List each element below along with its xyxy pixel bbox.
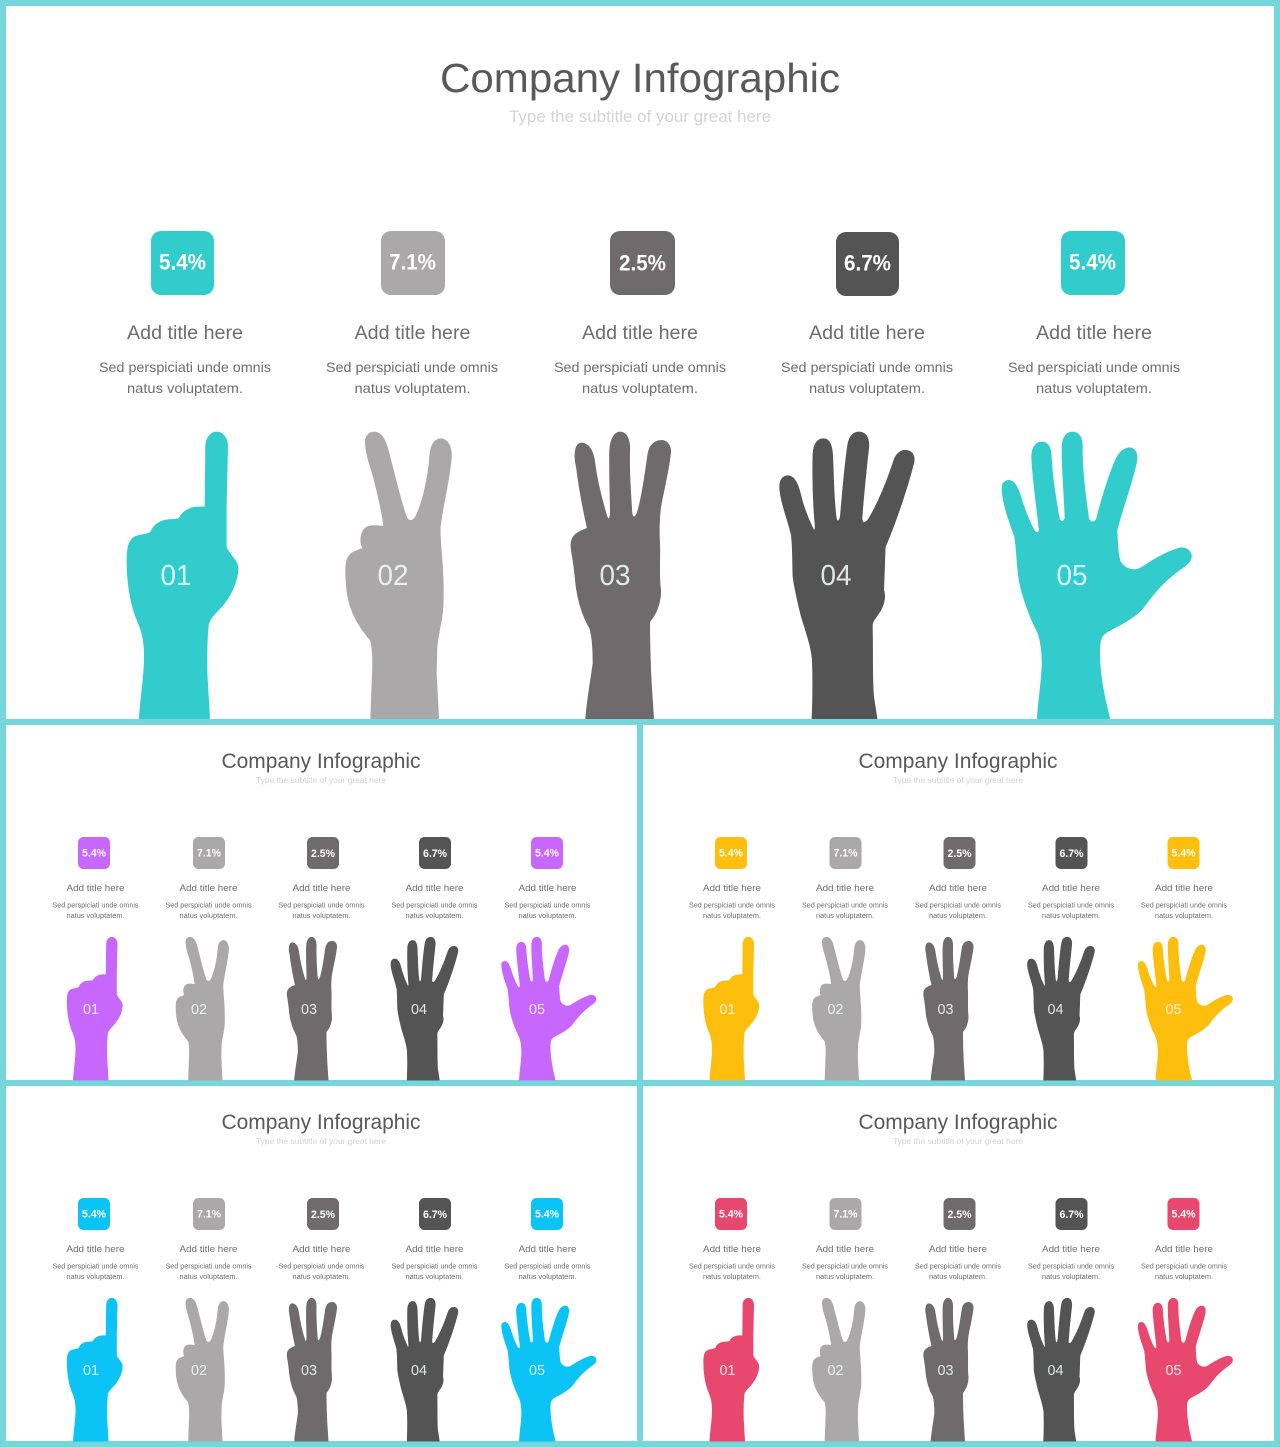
column 04: Add title here xyxy=(809,323,925,344)
small subtitle: Type the subtitle of your great here xyxy=(256,1136,386,1146)
column 03: 03 xyxy=(938,1002,954,1018)
column 01: natus voluptatem. xyxy=(703,1274,761,1281)
column 01: 01 xyxy=(720,1363,736,1379)
column 05: 05 xyxy=(529,1363,545,1379)
column 02: 7.1% xyxy=(197,1208,221,1220)
column 02: 7.1% xyxy=(834,1208,858,1220)
column 05: 05 xyxy=(1166,1002,1182,1018)
column 03: natus voluptatem. xyxy=(582,380,698,396)
column 03: 2.5% xyxy=(311,848,335,860)
small subtitle: Type the subtitle of your great here xyxy=(893,1136,1023,1146)
column 01: natus voluptatem. xyxy=(127,380,243,396)
panel: blue variant xyxy=(6,1086,637,1441)
column 02: Add title here xyxy=(354,323,470,344)
column 05: natus voluptatem. xyxy=(1036,380,1152,396)
column 04: 04 xyxy=(1048,1002,1064,1018)
column 03: 03 xyxy=(301,1363,317,1379)
column 02: Sed perspiciati unde omnis xyxy=(166,902,252,910)
column 01: natus voluptatem. xyxy=(66,913,125,920)
column 03: natus voluptatem. xyxy=(929,1274,987,1281)
column 04 xyxy=(1028,837,1114,1080)
column 03: natus voluptatem. xyxy=(292,913,351,920)
column 04: natus voluptatem. xyxy=(1042,1274,1100,1281)
column 04: natus voluptatem. xyxy=(406,1274,464,1281)
panel: purple variant xyxy=(6,725,637,1080)
column 01: 5.4% xyxy=(159,250,206,274)
column 05: 5.4% xyxy=(535,848,559,860)
column 01 xyxy=(52,1198,139,1441)
column 03: Sed perspiciati unde omnis xyxy=(915,902,1001,910)
column 01: Sed perspiciati unde omnis xyxy=(52,902,139,910)
column 02: Add title here xyxy=(816,1244,874,1255)
column 05: 05 xyxy=(1056,560,1088,592)
small title: Company Infographic xyxy=(222,1111,420,1134)
column 02: natus voluptatem. xyxy=(816,913,874,920)
column 01: Sed perspiciati unde omnis xyxy=(689,1264,775,1270)
column 04 xyxy=(391,1198,478,1441)
column 04: 6.7% xyxy=(423,1209,447,1221)
column 01: 01 xyxy=(83,1363,99,1379)
column 03 xyxy=(915,837,1001,1080)
column 03 xyxy=(278,837,365,1080)
column 05: 05 xyxy=(1166,1363,1182,1379)
column 02 xyxy=(802,1198,888,1441)
column 04: Add title here xyxy=(1042,1244,1100,1255)
column 05: natus voluptatem. xyxy=(1155,913,1213,920)
column 02: 02 xyxy=(191,1002,207,1018)
column 05: Sed perspiciati unde omnis xyxy=(504,902,591,910)
column 01: Sed perspiciati unde omnis xyxy=(689,902,775,910)
column 05 xyxy=(502,1198,596,1441)
column 05: 5.4% xyxy=(1172,1208,1196,1220)
column 02: 02 xyxy=(828,1002,844,1018)
column 05: Sed perspiciati unde omnis xyxy=(1008,359,1180,375)
column 04: Add title here xyxy=(1042,883,1100,894)
column 02: Sed perspiciati unde omnis xyxy=(326,359,498,375)
column 04: Sed perspiciati unde omnis xyxy=(392,902,478,910)
column 04 xyxy=(1028,1198,1114,1441)
column 05 xyxy=(502,837,596,1080)
column 01: 5.4% xyxy=(82,848,106,860)
column 04: Add title here xyxy=(406,1244,464,1255)
column 02: natus voluptatem. xyxy=(816,1274,874,1281)
column 05: 5.4% xyxy=(1172,848,1196,860)
column 03: natus voluptatem. xyxy=(929,913,987,920)
column 05: Add title here xyxy=(1155,883,1213,894)
column 04: natus voluptatem. xyxy=(1042,913,1100,920)
column 01: 5.4% xyxy=(719,848,743,860)
column 03: Sed perspiciati unde omnis xyxy=(278,1264,365,1270)
column 03: Add title here xyxy=(582,323,698,344)
column 03 xyxy=(915,1198,1001,1441)
column 01 xyxy=(52,837,139,1080)
column 04: 6.7% xyxy=(1060,848,1084,860)
column 04: Sed perspiciati unde omnis xyxy=(1028,1264,1114,1270)
column 01 xyxy=(689,837,775,1080)
column 05: natus voluptatem. xyxy=(518,913,577,920)
column 02: Sed perspiciati unde omnis xyxy=(166,1264,252,1270)
panel: yellow variant xyxy=(643,725,1274,1080)
column 05: 05 xyxy=(529,1002,545,1018)
column 03: 2.5% xyxy=(311,1209,335,1221)
column 04: 04 xyxy=(411,1002,427,1018)
column 02 xyxy=(166,1198,252,1441)
column 02: Add title here xyxy=(816,883,874,894)
column 01: Add title here xyxy=(66,1244,124,1255)
column 04: 04 xyxy=(1048,1363,1064,1379)
column 03: 03 xyxy=(301,1002,317,1018)
column 05: natus voluptatem. xyxy=(1155,1274,1213,1281)
column 02: Sed perspiciati unde omnis xyxy=(802,1264,888,1270)
column 01: natus voluptatem. xyxy=(703,913,761,920)
column 04: Add title here xyxy=(406,883,464,894)
small subtitle: Type the subtitle of your great here xyxy=(893,775,1023,785)
column 02: 02 xyxy=(191,1363,207,1379)
small subtitle: Type the subtitle of your great here xyxy=(256,775,386,785)
column 04 xyxy=(391,837,478,1080)
column 05: Sed perspiciati unde omnis xyxy=(1141,1264,1227,1270)
column 04: 6.7% xyxy=(1060,1209,1084,1221)
column 04: Sed perspiciati unde omnis xyxy=(392,1264,478,1270)
column 03: Add title here xyxy=(292,1244,350,1255)
column 03: 03 xyxy=(600,560,630,592)
column 03: Sed perspiciati unde omnis xyxy=(278,902,365,910)
column 04 xyxy=(780,232,953,718)
column 05: Add title here xyxy=(1036,323,1152,344)
column 01: 01 xyxy=(720,1002,736,1018)
column 01: 5.4% xyxy=(82,1208,106,1220)
panel: main slide xyxy=(6,6,1274,719)
column 02: 7.1% xyxy=(197,848,221,860)
column 04: Sed perspiciati unde omnis xyxy=(1028,902,1114,910)
column 04: natus voluptatem. xyxy=(406,913,464,920)
column 01 xyxy=(689,1198,775,1441)
column 04: 6.7% xyxy=(844,250,891,276)
column 02: natus voluptatem. xyxy=(180,913,238,920)
small title: Company Infographic xyxy=(222,750,420,773)
small title: Company Infographic xyxy=(858,1111,1058,1134)
column 04: 04 xyxy=(411,1363,427,1379)
column 01: 01 xyxy=(160,560,192,592)
column 04: Sed perspiciati unde omnis xyxy=(781,359,953,375)
column 03: 03 xyxy=(938,1363,954,1379)
column 02 xyxy=(802,837,888,1080)
column 02: 7.1% xyxy=(389,250,436,274)
column 04: natus voluptatem. xyxy=(809,380,925,396)
column 03: 2.5% xyxy=(619,250,666,276)
column 01: Sed perspiciati unde omnis xyxy=(99,359,271,375)
column 03: Add title here xyxy=(292,883,350,894)
column 03: 2.5% xyxy=(948,1209,972,1221)
column 02: 02 xyxy=(828,1363,844,1379)
subtitle: Type the subtitle of your great here xyxy=(509,107,771,126)
column 01: Add title here xyxy=(703,1244,761,1255)
column 02: natus voluptatem. xyxy=(354,380,470,396)
column 05: Add title here xyxy=(518,883,576,894)
small title: Company Infographic xyxy=(858,750,1058,773)
panel: pink variant xyxy=(643,1086,1274,1441)
column 05: Sed perspiciati unde omnis xyxy=(1141,902,1227,910)
column 04: 6.7% xyxy=(423,848,447,860)
column 02: Add title here xyxy=(180,1244,238,1255)
column 02: 02 xyxy=(378,560,408,592)
column 05: Sed perspiciati unde omnis xyxy=(504,1264,591,1270)
column 05 xyxy=(1002,231,1191,718)
column 03: Add title here xyxy=(929,883,987,894)
column 01: Sed perspiciati unde omnis xyxy=(52,1264,139,1270)
column 03 xyxy=(278,1198,365,1441)
column 03: Sed perspiciati unde omnis xyxy=(554,359,726,375)
column 03: natus voluptatem. xyxy=(292,1274,351,1281)
column 03: Sed perspiciati unde omnis xyxy=(915,1264,1001,1270)
column 01 xyxy=(99,231,271,718)
column 01: Add title here xyxy=(703,883,761,894)
column 05: Add title here xyxy=(518,1244,576,1255)
column 01: 5.4% xyxy=(719,1208,743,1220)
column 03: Add title here xyxy=(929,1244,987,1255)
column 02: 7.1% xyxy=(834,848,858,860)
column 05: natus voluptatem. xyxy=(518,1274,577,1281)
column 01: Add title here xyxy=(66,883,124,894)
column 04: 04 xyxy=(820,560,852,592)
column 01: natus voluptatem. xyxy=(66,1274,125,1281)
column 05 xyxy=(1138,1198,1233,1441)
column 02: natus voluptatem. xyxy=(180,1274,238,1281)
column 02: Add title here xyxy=(180,883,238,894)
column 05: 5.4% xyxy=(535,1208,559,1220)
column 05: Add title here xyxy=(1155,1244,1213,1255)
column 02: Sed perspiciati unde omnis xyxy=(802,902,888,910)
column 02 xyxy=(166,837,252,1080)
column 05: 5.4% xyxy=(1069,250,1116,274)
title: Company Infographic xyxy=(440,55,840,101)
column 01: Add title here xyxy=(127,323,243,344)
column 02 xyxy=(326,231,498,718)
column 03 xyxy=(554,231,726,718)
column 05 xyxy=(1138,837,1233,1080)
column 03: 2.5% xyxy=(948,848,972,860)
column 01: 01 xyxy=(83,1002,99,1018)
